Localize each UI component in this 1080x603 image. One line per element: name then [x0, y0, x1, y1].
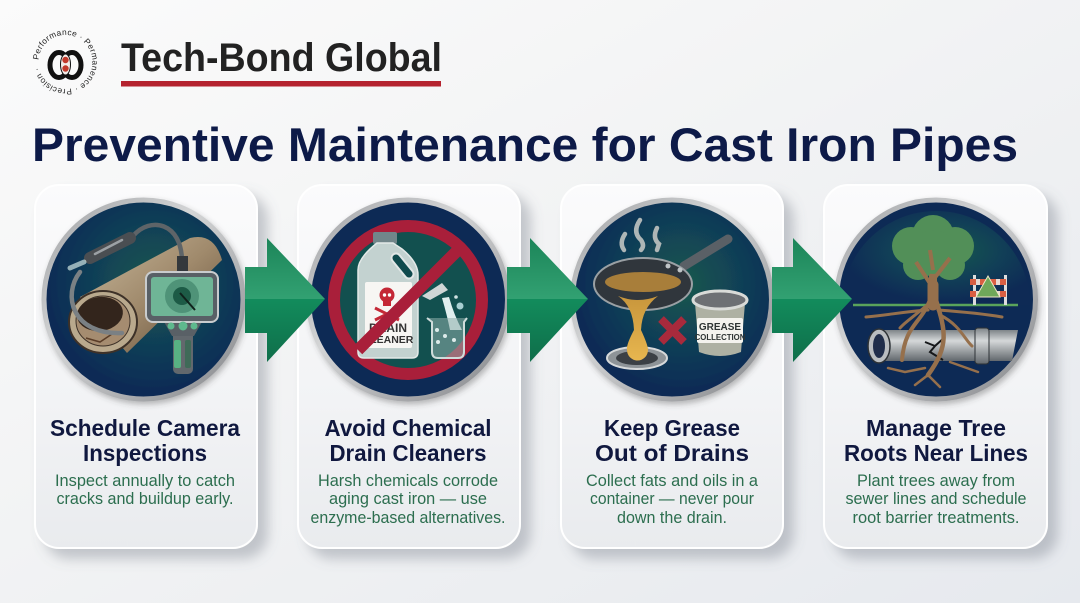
panel 3 text: container — never pour — [590, 490, 754, 508]
prohibition ring — [334, 226, 482, 374]
inspection monitor — [146, 256, 218, 374]
panel 4 text — [846, 472, 1026, 527]
tree canopy — [892, 215, 974, 288]
drain — [607, 347, 667, 369]
red cross — [661, 319, 684, 342]
grease collection container: COLLECTION — [695, 333, 746, 342]
panel 2 heading — [324, 415, 492, 466]
panel: avoid chemical drain cleaners — [298, 185, 520, 548]
rusty pipe — [69, 237, 222, 353]
title: Preventive Maintenance for Cast Iron Pipes — [32, 118, 1018, 171]
panel 4 heading: Manage Tree — [866, 415, 1006, 441]
panel 3 heading: Out of Drains — [595, 440, 749, 466]
panel 1 text — [55, 472, 235, 508]
broken pipe — [868, 328, 1018, 364]
panel 2 text: enzyme-based alternatives. — [310, 509, 506, 527]
logo: Performance · Permanence · Precision · — [32, 30, 97, 94]
panel 1 heading — [50, 415, 240, 466]
panel 2 text — [310, 472, 506, 527]
bottle — [358, 232, 418, 358]
arrow 3 — [772, 238, 852, 362]
grease collection container: GREASE — [699, 322, 741, 333]
panel 3 text: Collect fats and oils in a — [586, 472, 759, 490]
bottle: CLEANER — [363, 334, 414, 346]
panel 3 text: down the drain. — [617, 509, 727, 527]
panel: manage tree roots — [824, 185, 1047, 548]
panel 1 text: Inspect annually to catch — [55, 472, 235, 490]
roots — [866, 258, 1002, 387]
panel: keep grease out of drains — [561, 185, 783, 548]
camera cable and head — [70, 225, 182, 333]
panel 3 heading — [595, 415, 749, 466]
prohibition slash — [358, 250, 458, 350]
panel 3 heading: Keep Grease — [604, 415, 740, 441]
steam — [622, 220, 659, 250]
panel 2 text: aging cast iron — use — [329, 490, 487, 508]
panel 2 text: Harsh chemicals corrode — [318, 472, 498, 490]
panel 4 text: Plant trees away from — [857, 472, 1015, 490]
bottle: DRAIN — [369, 321, 407, 335]
panel 4 text: sewer lines and schedule — [846, 490, 1026, 508]
icon: grease — [572, 200, 772, 399]
grease collection container — [693, 291, 747, 356]
panel: schedule camera inspections — [35, 185, 257, 548]
brand name: Tech-Bond Global — [121, 36, 442, 80]
panel 4 text: root barrier treatments. — [852, 509, 1020, 527]
beaker and pour — [422, 283, 467, 358]
arrow 2 — [507, 238, 588, 362]
panel 1 heading: Inspections — [83, 440, 207, 466]
panel 4 heading — [844, 415, 1028, 466]
panel 1 heading: Schedule Camera — [50, 415, 240, 441]
frying pan — [594, 239, 728, 310]
panel 2 heading: Drain Cleaners — [330, 440, 486, 466]
icon: tree roots — [836, 200, 1036, 399]
panel 2 heading: Avoid Chemical — [324, 415, 492, 441]
panel 4 heading: Roots Near Lines — [844, 440, 1028, 466]
grease drip — [618, 296, 658, 360]
arrow 1 — [245, 238, 325, 362]
grass line — [853, 304, 1018, 306]
icon: camera inspection — [44, 200, 243, 399]
icon: no chemical drain cleaner — [308, 200, 508, 399]
panel 1 text: cracks and buildup early. — [56, 490, 234, 508]
panel 3 text — [586, 472, 759, 527]
warning barrier — [970, 275, 1007, 305]
